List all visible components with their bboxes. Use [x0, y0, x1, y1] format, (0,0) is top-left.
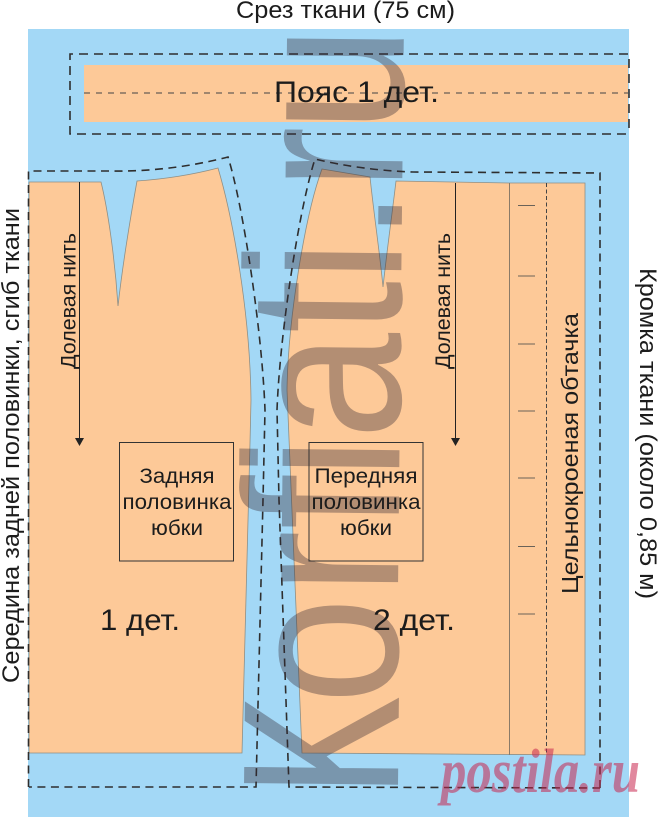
arrow: back grain line [75, 182, 84, 446]
label box: front half: юбки [340, 517, 392, 540]
label: piece count back: 1 дет. [100, 604, 180, 637]
label box: front half: Передняя [314, 465, 418, 488]
label box: back half: юбки [151, 517, 203, 540]
label box: front half [309, 442, 423, 561]
watermark: Korfiati.ru: orfiati.ru [197, 24, 451, 705]
label: piece count front: 2 дет. [373, 604, 455, 637]
panel: front skirt piece with facing [277, 159, 600, 788]
label box: back half: половинка [122, 491, 232, 514]
label box: front half: половинка [312, 491, 421, 514]
label box: back half: Задняя [140, 465, 214, 488]
label: back grain line: Долевая нить [58, 233, 80, 369]
label box: back half [120, 442, 234, 561]
watermark: Korfiati.ru: K [200, 697, 444, 796]
label: facing: Цельнокроеная обтачка [557, 313, 583, 594]
label: front grain line: Долевая нить [432, 233, 455, 369]
panel: back skirt piece [28, 157, 265, 787]
label: waistband: Пояс 1 дет. [274, 76, 439, 109]
panel: waistband piece [70, 54, 629, 134]
arrow: front grain line [451, 183, 460, 446]
